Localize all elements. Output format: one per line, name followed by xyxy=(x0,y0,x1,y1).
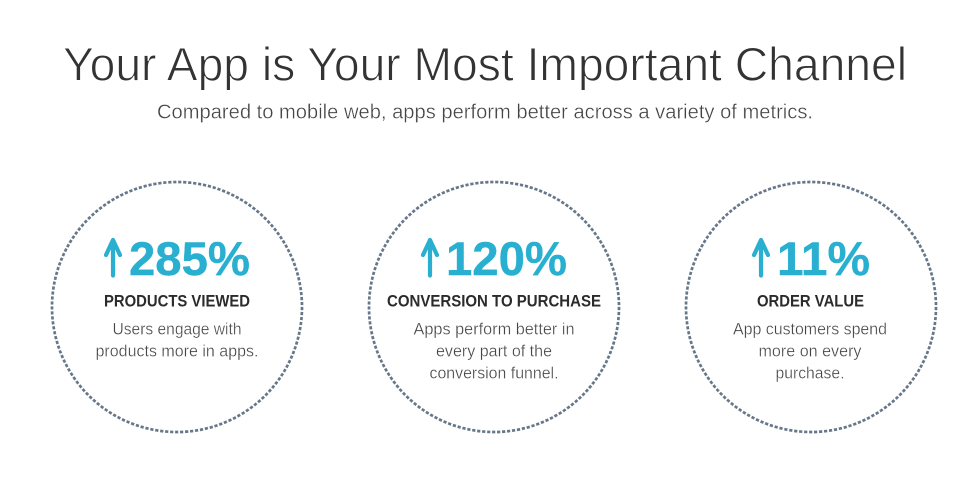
subtitle: Compared to mobile web, apps perform better across a variety of metrics. xyxy=(157,102,813,124)
icon: up arrow xyxy=(423,240,437,276)
panel: order value xyxy=(686,182,936,432)
description xyxy=(96,320,258,360)
panel: conversion to purchase xyxy=(369,182,619,432)
description: products more in apps. xyxy=(96,342,258,360)
dashed circle xyxy=(369,182,619,432)
icon: up arrow xyxy=(754,240,768,276)
heading: order value: ORDER VALUE xyxy=(757,292,864,310)
description: Users engage with xyxy=(112,320,242,338)
dashed circle xyxy=(686,182,936,432)
heading: conversion to purchase: CONVERSION TO PURCHASE xyxy=(387,292,601,310)
description: App customers spend xyxy=(733,320,887,338)
description xyxy=(414,320,574,382)
description: more on every xyxy=(758,342,862,360)
metric: 11%: 11% xyxy=(777,232,870,285)
description: Apps perform better in xyxy=(414,320,574,338)
dashed circle xyxy=(52,182,302,432)
metric: 285%: 285% xyxy=(129,232,250,285)
heading: products viewed: PRODUCTS VIEWED xyxy=(104,292,250,310)
icon: up arrow xyxy=(106,240,120,276)
description: purchase. xyxy=(776,364,844,382)
title: Your App is Your Most Important Channel xyxy=(63,38,907,90)
description: every part of the xyxy=(436,342,552,360)
description xyxy=(733,320,887,382)
panel: products viewed xyxy=(52,182,302,432)
metric: 120%: 120% xyxy=(446,232,567,285)
description: conversion funnel. xyxy=(430,364,558,382)
